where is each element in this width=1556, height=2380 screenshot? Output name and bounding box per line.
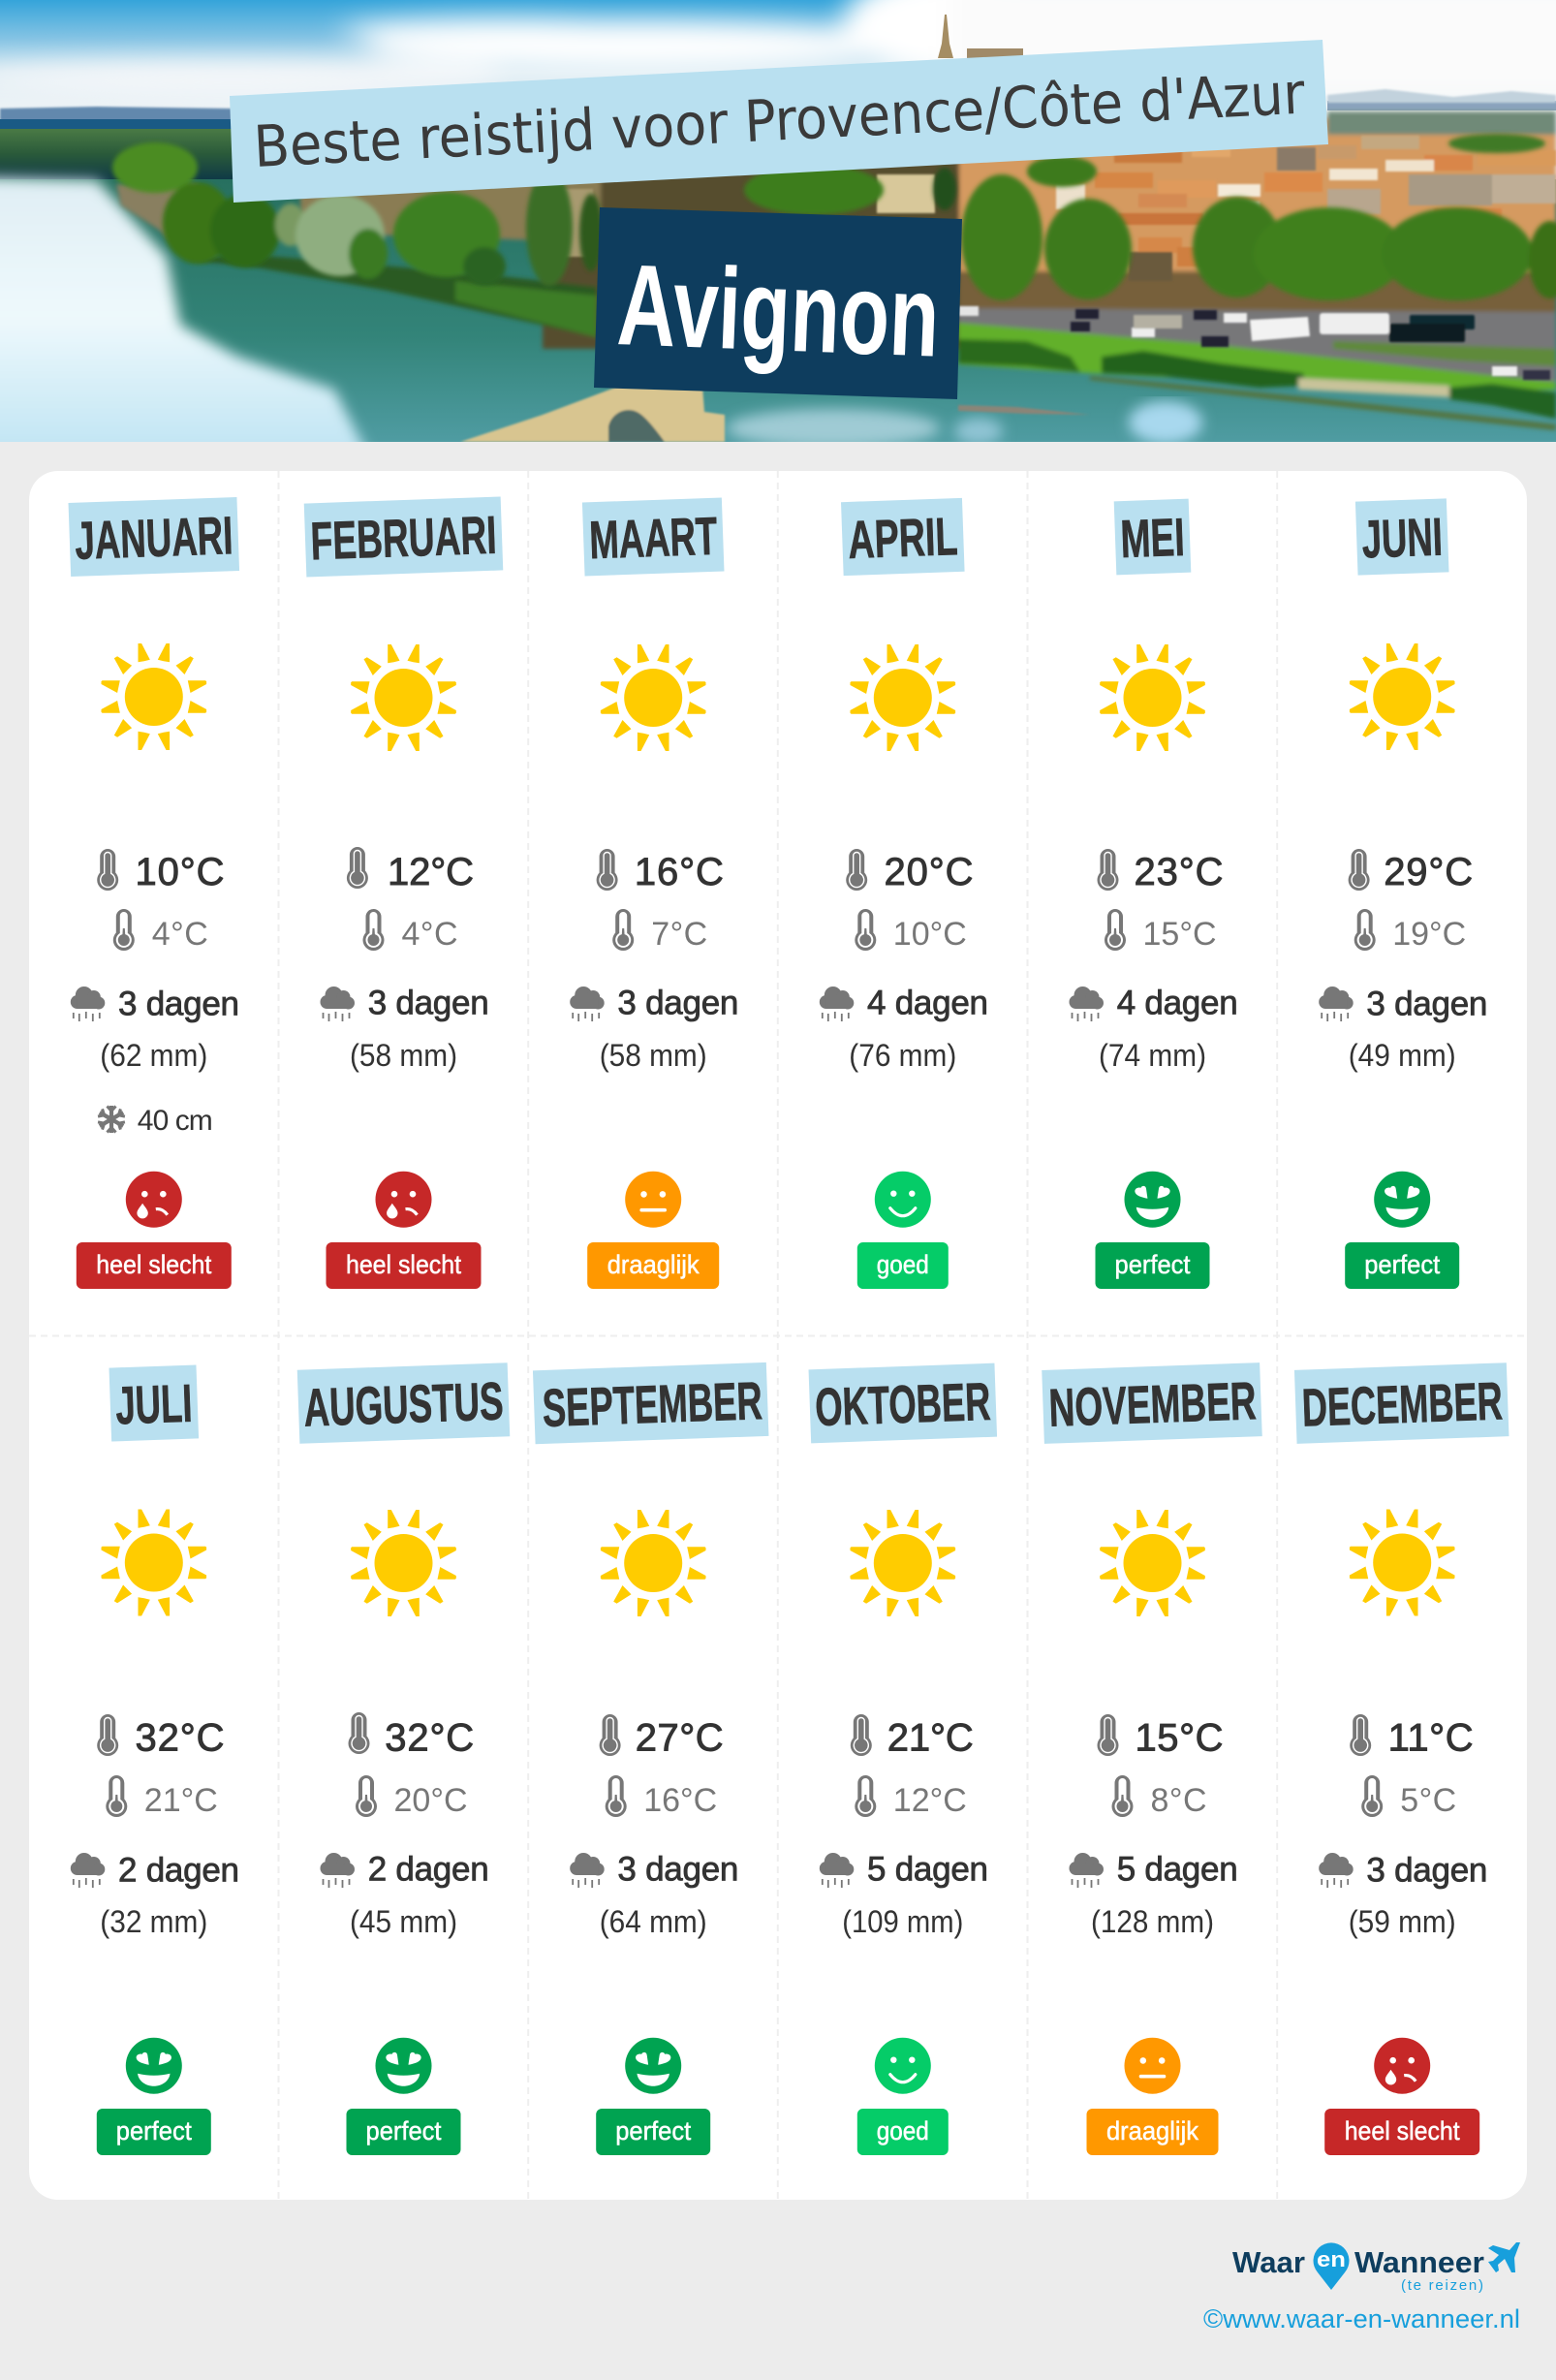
icon: map pin bbox=[1314, 2242, 1349, 2290]
rain days: 3 dagen bbox=[118, 985, 239, 1023]
min temperature bbox=[855, 909, 967, 953]
max temperature: 29°C bbox=[1384, 851, 1473, 893]
rating face: very bad bbox=[126, 1172, 182, 1228]
min temperature bbox=[1112, 1775, 1207, 1819]
min temperature: 8°C bbox=[1151, 1782, 1207, 1819]
snow: 40 cm bbox=[138, 1105, 213, 1137]
max temperature: 21°C bbox=[887, 1717, 974, 1760]
rating label bbox=[347, 2109, 461, 2155]
month label: juli bbox=[109, 1364, 199, 1442]
rating label: heel slecht bbox=[346, 1250, 461, 1279]
logo: Waar en Wanneer: Waar bbox=[1232, 2245, 1305, 2279]
column: mei bbox=[1070, 499, 1238, 1289]
max temperature bbox=[1097, 1714, 1223, 1760]
rating face: tolerable bbox=[1124, 2038, 1180, 2094]
rating face: good bbox=[875, 2038, 931, 2094]
website url: ©www.waar-en-wanneer.nl bbox=[1203, 2304, 1520, 2333]
icon: sun bbox=[1100, 1510, 1205, 1616]
max temperature: 15°C bbox=[1136, 1717, 1223, 1760]
photo: Rhône river and Avignon skyline bbox=[0, 0, 1556, 455]
icon: sun bbox=[851, 1510, 955, 1616]
min temperature: 15°C bbox=[1143, 916, 1217, 953]
max temperature bbox=[597, 849, 724, 893]
max temperature bbox=[851, 1714, 974, 1760]
icon: sun bbox=[351, 1510, 456, 1616]
rain days: 3 dagen bbox=[1366, 1851, 1487, 1890]
month label: maart bbox=[582, 498, 724, 576]
min temperature: 20°C bbox=[393, 1782, 467, 1819]
rating label: draaglijk bbox=[1106, 2116, 1198, 2145]
min temperature bbox=[1105, 909, 1217, 953]
precipitation: (74 mm) bbox=[1099, 1038, 1206, 1073]
precipitation: (49 mm) bbox=[1349, 1038, 1456, 1073]
month label: maart: MAART bbox=[588, 506, 718, 570]
rating label: perfect bbox=[615, 2116, 692, 2145]
icon: sun bbox=[101, 1510, 206, 1616]
min temperature bbox=[356, 1775, 467, 1819]
month label: november bbox=[1042, 1362, 1262, 1444]
max temperature: 27°C bbox=[636, 1717, 724, 1760]
rain days: 3 dagen bbox=[617, 985, 738, 1021]
column: oktober bbox=[809, 1363, 997, 2155]
rain days: 5 dagen bbox=[1117, 1851, 1238, 1888]
panel: monthly climate table bbox=[29, 471, 1527, 2200]
min temperature: 4°C bbox=[152, 916, 208, 953]
rating label bbox=[857, 2109, 949, 2155]
column: november bbox=[1042, 1362, 1262, 2155]
icon: sun bbox=[1350, 1510, 1455, 1616]
min temperature bbox=[606, 1775, 717, 1819]
rating label bbox=[1324, 2109, 1479, 2155]
min temperature bbox=[1361, 1775, 1456, 1819]
column: augustus bbox=[297, 1362, 510, 2155]
precipitation: (32 mm) bbox=[100, 1904, 207, 1939]
rating face: perfect bbox=[625, 2038, 681, 2094]
column: februari bbox=[304, 496, 503, 1289]
precipitation: (62 mm) bbox=[100, 1038, 207, 1073]
column: september bbox=[533, 1362, 768, 2155]
water bbox=[0, 179, 1556, 442]
max temperature: 16°C bbox=[635, 851, 724, 893]
month label: februari bbox=[304, 496, 503, 578]
min temperature bbox=[855, 1775, 967, 1819]
month label: augustus bbox=[297, 1362, 510, 1444]
precipitation: (58 mm) bbox=[600, 1038, 707, 1073]
rating face: tolerable bbox=[625, 1172, 681, 1228]
precipitation: (59 mm) bbox=[1349, 1904, 1456, 1939]
rating label bbox=[97, 2109, 211, 2155]
max temperature bbox=[349, 1712, 474, 1760]
month label: oktober bbox=[809, 1363, 997, 1443]
max temperature bbox=[1097, 849, 1223, 893]
month label: januari: JANUARI bbox=[74, 505, 233, 571]
precipitation: (58 mm) bbox=[350, 1038, 457, 1073]
city name box: Avignon bbox=[615, 240, 942, 382]
max temperature: 32°C bbox=[136, 1717, 225, 1760]
rain days: 3 dagen bbox=[1366, 985, 1487, 1023]
min temperature: 4°C bbox=[401, 916, 457, 953]
min temperature: 16°C bbox=[643, 1782, 717, 1819]
title banner: Beste reistijd voor Provence/Côte d'Azur bbox=[252, 60, 1307, 180]
max temperature: 23°C bbox=[1134, 851, 1223, 893]
month label: mei bbox=[1114, 499, 1191, 575]
month label: augustus: AUGUSTUS bbox=[303, 1370, 505, 1438]
icon: sun bbox=[601, 1510, 705, 1616]
month label: juni: JUNI bbox=[1361, 507, 1444, 569]
max temperature bbox=[600, 1714, 724, 1760]
logo: Waar en Wanneer: Wanneer bbox=[1354, 2245, 1484, 2279]
max temperature bbox=[1350, 1714, 1474, 1760]
icon: map pin: en bbox=[1317, 2247, 1346, 2271]
icon: sun bbox=[601, 644, 705, 751]
snow bbox=[98, 1105, 213, 1137]
icon: sun bbox=[1100, 644, 1205, 751]
column: december bbox=[1294, 1362, 1509, 2155]
rating label bbox=[587, 1242, 719, 1289]
max temperature: 32°C bbox=[385, 1717, 474, 1760]
rating label bbox=[596, 2109, 710, 2155]
max temperature bbox=[1349, 849, 1473, 893]
max temperature bbox=[97, 1714, 224, 1760]
rating face: perfect bbox=[376, 2038, 432, 2094]
min temperature: 21°C bbox=[144, 1782, 218, 1819]
rain days: 4 dagen bbox=[867, 985, 988, 1021]
rain days: 3 dagen bbox=[368, 985, 489, 1021]
rating face: very bad bbox=[376, 1172, 432, 1228]
max temperature bbox=[97, 849, 224, 893]
rain days: 2 dagen bbox=[368, 1851, 489, 1888]
precipitation: (109 mm) bbox=[842, 1904, 963, 1939]
rating label bbox=[1345, 1242, 1459, 1289]
icon: sun bbox=[851, 644, 955, 751]
column: april bbox=[820, 498, 988, 1289]
precipitation: (45 mm) bbox=[350, 1904, 457, 1939]
rating label: goed bbox=[877, 2116, 929, 2145]
month label: oktober: OKTOBER bbox=[814, 1371, 991, 1437]
column: juli bbox=[71, 1364, 239, 2155]
max temperature: 20°C bbox=[884, 851, 973, 893]
icon: sun bbox=[1350, 643, 1455, 750]
logo: Waar en Wanneer bbox=[1232, 2242, 1520, 2294]
icon: sun bbox=[351, 644, 456, 751]
min temperature: 10°C bbox=[893, 916, 967, 953]
month label: januari bbox=[69, 497, 239, 577]
header: photo of Avignon with titles bbox=[0, 0, 1556, 455]
column: januari bbox=[69, 497, 239, 1289]
max temperature: 11°C bbox=[1388, 1717, 1474, 1760]
precipitation: (76 mm) bbox=[849, 1038, 956, 1073]
city name box bbox=[594, 207, 962, 399]
rating label: perfect bbox=[1114, 1250, 1191, 1279]
min temperature bbox=[106, 1775, 218, 1819]
rating label bbox=[326, 1242, 481, 1289]
rating label bbox=[1095, 1242, 1209, 1289]
month label: september bbox=[533, 1362, 768, 1444]
rating label: perfect bbox=[116, 2116, 192, 2145]
min temperature: 7°C bbox=[651, 916, 707, 953]
month label: februari: FEBRUARI bbox=[310, 505, 498, 571]
max temperature: 10°C bbox=[136, 851, 225, 893]
min temperature bbox=[1354, 909, 1466, 953]
min temperature bbox=[113, 909, 208, 953]
month label: november: NOVEMBER bbox=[1048, 1370, 1258, 1438]
icon: airplane bbox=[1488, 2242, 1520, 2272]
rain days: 4 dagen bbox=[1117, 985, 1238, 1021]
rating face: perfect bbox=[1124, 1172, 1180, 1228]
column: juni bbox=[1319, 498, 1487, 1289]
month label: juli: JULI bbox=[114, 1373, 193, 1435]
rating face: perfect bbox=[1374, 1172, 1430, 1228]
rating label: perfect bbox=[366, 2116, 442, 2145]
rating label: goed bbox=[877, 1250, 929, 1279]
rating label: heel slecht bbox=[1345, 2116, 1460, 2145]
min temperature bbox=[612, 909, 707, 953]
column: maart bbox=[570, 498, 738, 1289]
rating face: good bbox=[875, 1172, 931, 1228]
precipitation: (128 mm) bbox=[1091, 1904, 1214, 1939]
icon: sun bbox=[101, 643, 206, 750]
month label: april: APRIL bbox=[847, 506, 958, 570]
rating label bbox=[1087, 2109, 1219, 2155]
min temperature: 19°C bbox=[1392, 916, 1466, 953]
month label: mei: MEI bbox=[1119, 507, 1186, 569]
min temperature: 12°C bbox=[893, 1782, 967, 1819]
logo: Waar en Wanneer: (te reizen) bbox=[1401, 2277, 1483, 2294]
rating label: perfect bbox=[1364, 1250, 1441, 1279]
old town rooftops bbox=[543, 136, 1556, 281]
max temperature bbox=[846, 849, 973, 893]
month label: september: SEPTEMBER bbox=[542, 1370, 763, 1438]
rating label bbox=[857, 1242, 949, 1289]
rain days: 3 dagen bbox=[617, 1851, 738, 1888]
month label: april bbox=[841, 498, 965, 576]
min temperature: 5°C bbox=[1400, 1782, 1456, 1819]
rating label: heel slecht bbox=[96, 1250, 212, 1279]
rating face: perfect bbox=[126, 2038, 182, 2094]
rating label: draaglijk bbox=[607, 1250, 700, 1279]
precipitation: (64 mm) bbox=[600, 1904, 707, 1939]
max temperature bbox=[347, 847, 474, 893]
rain days: 5 dagen bbox=[867, 1851, 988, 1888]
min temperature bbox=[362, 909, 457, 953]
rain days: 2 dagen bbox=[118, 1851, 239, 1890]
month label: juni bbox=[1355, 498, 1448, 576]
max temperature: 12°C bbox=[388, 851, 474, 893]
rating label bbox=[77, 1242, 232, 1289]
rating face: very bad bbox=[1374, 2038, 1430, 2094]
